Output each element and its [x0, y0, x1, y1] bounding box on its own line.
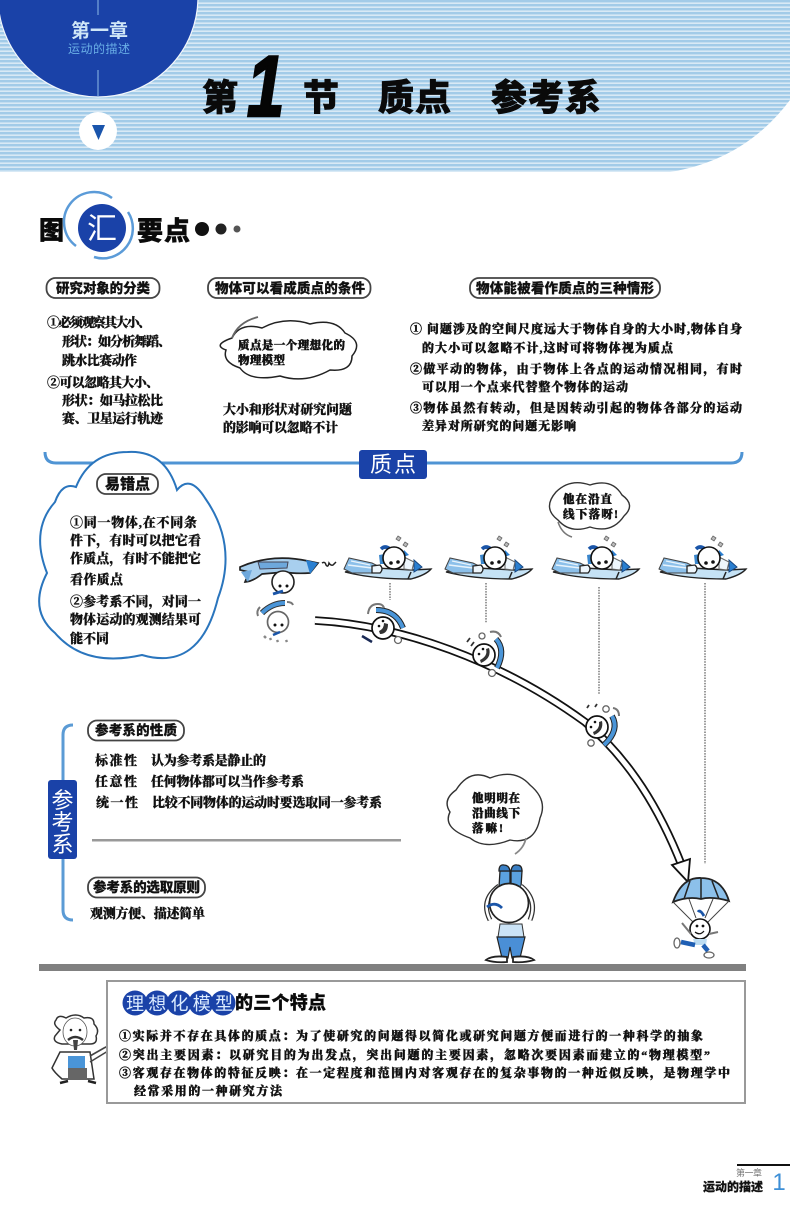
footer page marker: 第一章	[736, 1167, 762, 1178]
arrow: curved fall path	[315, 620, 690, 882]
speech bubble: straight line: 线下落呀!	[563, 507, 618, 521]
panel: reference frame: 参考系的选取原则	[93, 879, 200, 895]
speech bubble: straight line	[549, 483, 630, 537]
header stripe banner	[0, 0, 790, 172]
callout: common mistakes cloud: 能不同	[70, 631, 109, 646]
section heading: 图汇要点: 图	[39, 217, 64, 245]
footer page marker: 运动的描述	[703, 1179, 763, 1194]
panel: three cases of treating as a particle: ① 问题涉及的空间尺度远大于物体自身的大小时,物体自身	[410, 321, 742, 336]
illustration: falling person 2	[467, 632, 501, 676]
illustration: falling person 3	[586, 704, 619, 746]
speech bubble: curved line	[447, 774, 542, 854]
chapter badge: 运动的描述	[68, 41, 130, 56]
panel: reference frame: 考	[51, 810, 74, 835]
title: 质点	[378, 77, 451, 118]
panel: reference frame	[48, 720, 401, 921]
panel: three cases of treating as a particle	[410, 278, 742, 433]
callout: common mistakes cloud: 易错点	[105, 475, 150, 493]
callout: common mistakes cloud: ①同一物体,在不同条	[70, 515, 198, 530]
illustration: standing observer	[486, 865, 534, 962]
speech bubble: curved line: 沿曲线下	[472, 806, 522, 820]
panel: reference frame: 标准性	[95, 753, 137, 768]
panel: classification of research objects: ②可以忽略其大小、	[47, 375, 159, 391]
panel: classification of research objects: 跳水比赛动作	[62, 353, 137, 369]
illustration: falling person 1	[362, 604, 403, 644]
panel: three features of ideal model	[107, 981, 745, 1103]
bracket: 质点: 质点	[370, 452, 416, 477]
illustration: parachutist	[673, 878, 729, 958]
thought cloud: 质点是一个理想化的	[238, 338, 346, 352]
illustration: professor	[52, 1015, 108, 1083]
panel: classification of research objects: 形状：如分析舞蹈、	[62, 334, 171, 349]
panel: conditions for a particle	[208, 278, 370, 436]
illustration: first plane with person dropping	[240, 558, 336, 642]
title: 参考系	[491, 77, 601, 118]
panel: reference frame: 观测方便、描述简单	[90, 906, 205, 921]
panel: three features of ideal model: 的三个特点	[235, 992, 326, 1013]
callout: common mistakes cloud: 物体运动的观测结果可	[70, 612, 201, 627]
panel: three cases of treating as a particle: 的大小可以忽略不计,这时可将物体视为质点	[422, 340, 674, 355]
thought cloud: 物理模型	[238, 353, 286, 367]
title: 节	[303, 77, 339, 118]
title: 第	[202, 77, 238, 118]
illustration: plane 3	[445, 536, 532, 579]
section heading: 图汇要点: 要点	[137, 216, 190, 246]
footer page marker: 1	[772, 1169, 786, 1196]
callout: common mistakes cloud: 看作质点	[70, 572, 124, 588]
illustration: plane 5	[659, 536, 746, 579]
callout: common mistakes cloud: 件下，有时可以把它看	[70, 533, 201, 550]
panel: reference frame: 系	[51, 832, 74, 857]
speech bubble: straight line: 他在沿直	[563, 492, 612, 506]
panel: conditions for a particle: 物体可以看成质点的条件	[215, 280, 366, 296]
heading circles: 理想化模型	[126, 994, 233, 1014]
panel: reference frame: 参	[51, 788, 74, 813]
panel: classification of research objects	[46, 278, 171, 427]
panel: three cases of treating as a particle: ③物体虽然有转动，但是因转动引起的物体各部分的运动	[410, 400, 742, 415]
panel: reference frame: 统一性	[96, 795, 138, 810]
panel: conditions for a particle: 的影响可以忽略不计	[223, 420, 338, 436]
panel: three features of ideal model: ①实际并不存在具体的质点：为了使研究的问题得以简化或研究问题方便而进行的一种科学的抽象	[119, 1028, 703, 1043]
title	[202, 39, 601, 135]
panel: three features of ideal model: ②突出主要因素：以研究目的为出发点，突出问题的主要因素，忽略次要因素而建立的“物理模型”	[119, 1047, 710, 1062]
speech bubble: curved line: 落嘛!	[472, 821, 503, 835]
panel: reference frame: 比较不同物体的运动时要选取同一参考系	[152, 795, 383, 810]
chapter badge: 第一章	[71, 19, 128, 42]
panel: classification of research objects: 形状：如马拉松比	[62, 393, 163, 409]
panel: classification of research objects: 研究对象的分类	[56, 280, 150, 296]
footer page marker	[703, 1164, 790, 1196]
callout: common mistakes cloud	[39, 452, 226, 659]
panel: reference frame: 认为参考系是静止的	[151, 753, 266, 768]
section heading: 图汇要点	[39, 192, 240, 258]
thought cloud	[220, 317, 357, 379]
panel: classification of research objects: ①必须观察其大小、	[47, 315, 151, 331]
panel: reference frame: 参考系的性质	[95, 722, 178, 738]
panel: reference frame: 任意性	[95, 774, 137, 789]
panel: three cases of treating as a particle: 物体能被看作质点的三种情形	[476, 280, 654, 296]
panel: classification of research objects: 赛、卫星运行轨迹	[62, 411, 165, 427]
illustration: plane 2	[344, 536, 431, 579]
panel: three features of ideal model: 经常采用的一种研究方法	[134, 1083, 284, 1098]
panel: three cases of treating as a particle: 可以用一个点来代替整个物体的运动	[422, 379, 628, 394]
illustration: plane 4	[552, 536, 639, 579]
panel: three cases of treating as a particle: 差异对所研究的问题无影响	[422, 418, 576, 433]
section heading: 图汇要点: 汇	[87, 213, 117, 246]
panel: conditions for a particle: 大小和形状对研究问题	[223, 402, 352, 417]
speech bubble: curved line: 他明明在	[472, 791, 520, 805]
callout: common mistakes cloud: ②参考系不同，对同一	[70, 594, 201, 611]
panel: reference frame: 任何物体都可以当作参考系	[151, 774, 305, 790]
ground bar	[39, 964, 746, 971]
panel: three cases of treating as a particle: ②做平动的物体，由于物体上各点的运动情况相同，有时	[410, 361, 742, 376]
chapter badge	[0, 0, 198, 97]
title: 1	[247, 39, 284, 135]
down arrow button	[79, 112, 117, 150]
callout: common mistakes cloud: 作质点，有时不能把它	[70, 551, 201, 568]
panel: three features of ideal model: ③客观存在物体的特征反映：在一定程度和范围内对客观存在的复杂事物的一种近似反映，是物理学中	[119, 1065, 730, 1080]
bracket: 质点	[45, 450, 742, 479]
